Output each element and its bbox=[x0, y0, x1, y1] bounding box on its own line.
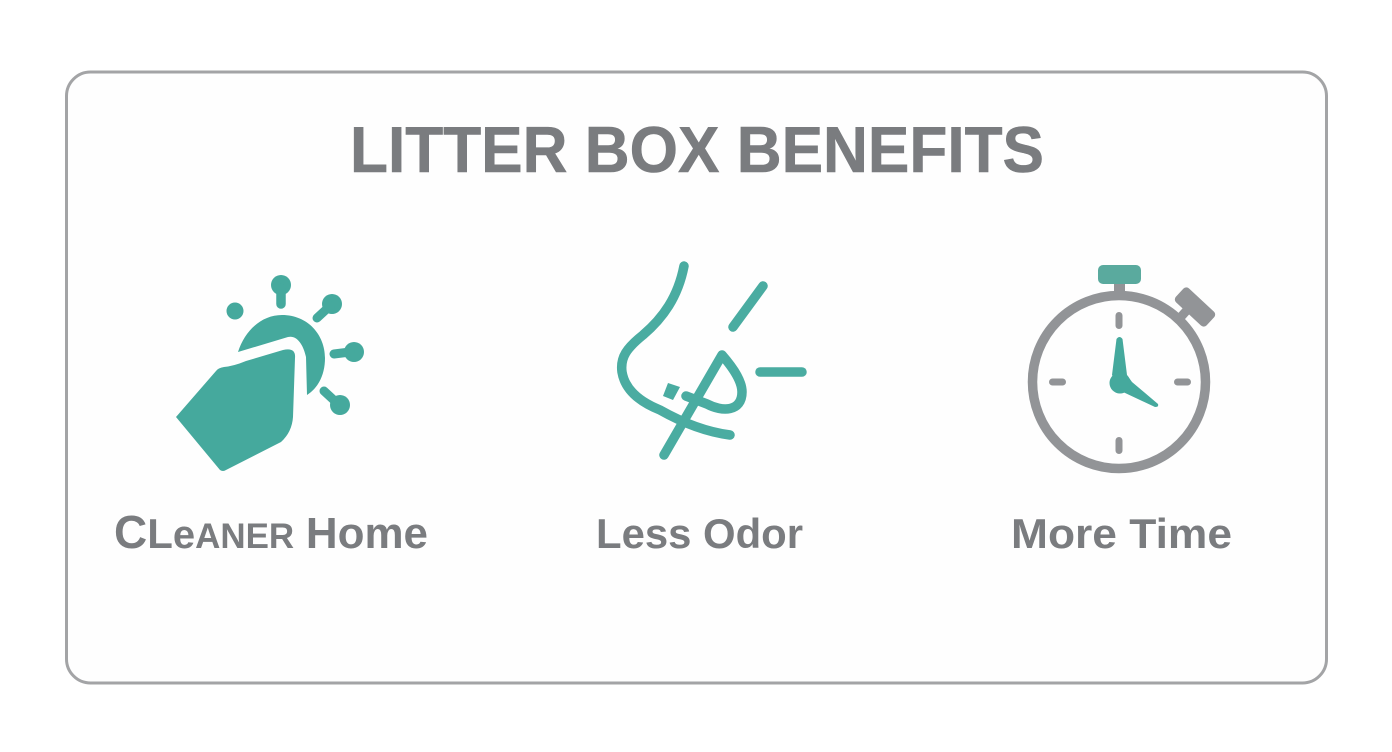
icon: stopwatch bbox=[1032, 265, 1217, 468]
panel: benefits card bbox=[66, 72, 1326, 683]
icon: nose with crossed-out odor bbox=[622, 266, 802, 455]
title: LITTER BOX BENEFITS bbox=[350, 113, 1044, 186]
icon: cleaner home tag with sparkle bbox=[176, 275, 364, 471]
label: less odor: Less Odor bbox=[596, 510, 803, 557]
label: cleaner home: CLeANER Home bbox=[114, 506, 428, 558]
label: more time: More Time bbox=[1011, 510, 1232, 557]
